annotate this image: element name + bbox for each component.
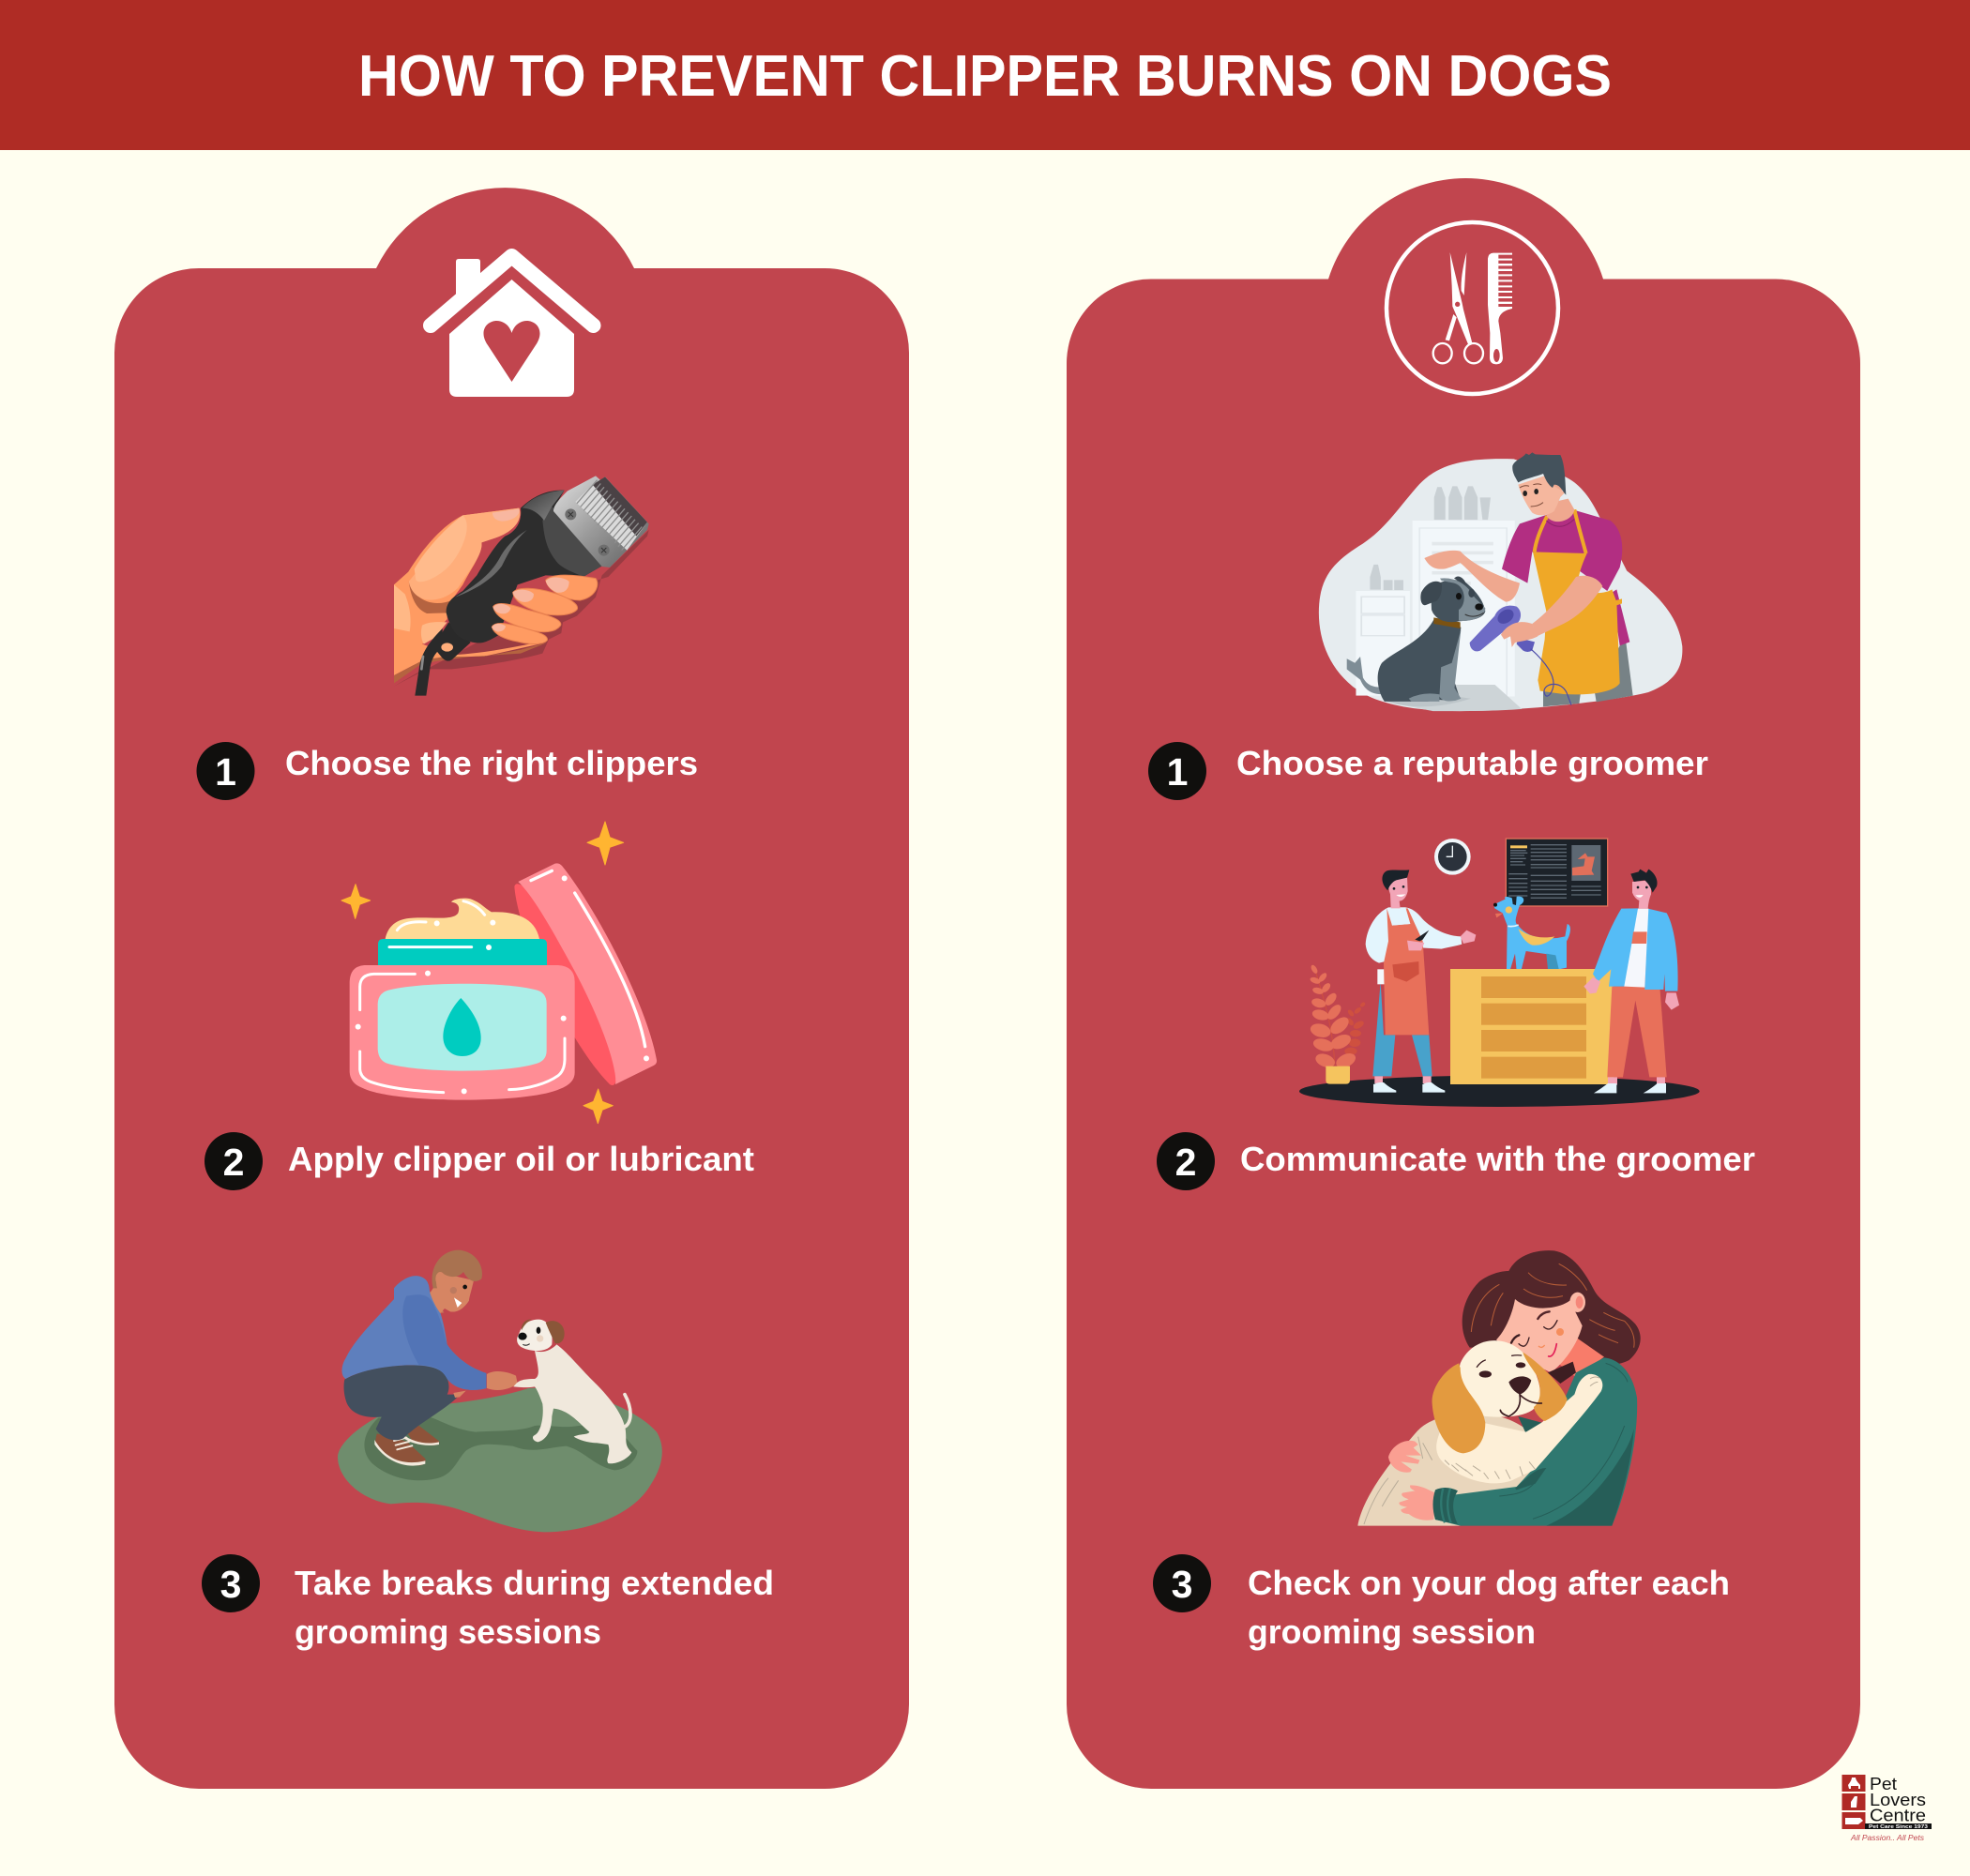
title: HOW TO PREVENT CLIPPER BURNS ON DOGS <box>358 44 1612 109</box>
logo: Pet Lovers Centre: Centre <box>1870 1807 1926 1825</box>
step 3: take breaks during extended grooming sessions: grooming sessions <box>295 1612 601 1651</box>
panel: at the groomer <box>1067 178 1860 1789</box>
logo: Pet Lovers Centre: Pet <box>1870 1775 1897 1793</box>
step 3: check on your dog after each grooming session: Check on your dog after each <box>1248 1564 1730 1602</box>
step 2: apply clipper oil or lubricant: 2 <box>223 1141 244 1184</box>
illustration: hand holding clippers <box>394 476 649 696</box>
header banner <box>0 0 1970 150</box>
logo: Pet Lovers Centre <box>1842 1775 1932 1842</box>
step 3: check on your dog after each grooming session: grooming session <box>1248 1612 1536 1651</box>
panel: at home <box>114 188 909 1789</box>
logo: Pet Lovers Centre: All Passion.. All Pets <box>1850 1834 1924 1842</box>
logo: Pet Lovers Centre: Pet Care Since 1973 <box>1869 1824 1928 1830</box>
step 2: communicate with the groomer: Communicate with the groomer <box>1240 1140 1755 1178</box>
step 1: choose a reputable groomer: Choose a reputable groomer <box>1236 744 1708 782</box>
step 3: check on your dog after each grooming session: 3 <box>1172 1563 1192 1606</box>
illustration: groomer drying dog <box>1319 452 1682 711</box>
step 1: choose a reputable groomer: 1 <box>1167 750 1188 794</box>
illustration: woman hugging dog <box>1357 1250 1641 1526</box>
illustration: talking to the groomer at counter <box>1299 839 1700 1107</box>
step 3: take breaks during extended grooming sessions <box>202 1554 774 1651</box>
step 2: apply clipper oil or lubricant <box>205 1132 754 1190</box>
step 1: choose the right clippers: Choose the right clippers <box>285 744 698 782</box>
step 3: take breaks during extended grooming sessions: 3 <box>220 1563 241 1606</box>
step 2: communicate with the groomer: 2 <box>1175 1141 1196 1184</box>
illustration: jar of lubricant <box>341 822 657 1124</box>
illustration: man shaking paw with dog <box>338 1250 662 1532</box>
step 2: apply clipper oil or lubricant: Apply clipper oil or lubricant <box>288 1140 754 1178</box>
icon: scissors and comb <box>1387 222 1558 394</box>
step 3: take breaks during extended grooming sessions: Take breaks during extended <box>295 1564 774 1602</box>
step 1: choose a reputable groomer <box>1148 742 1708 800</box>
step 3: check on your dog after each grooming session <box>1153 1554 1730 1651</box>
icon: house with heart <box>431 256 593 397</box>
step 1: choose the right clippers: 1 <box>215 750 236 794</box>
step 2: communicate with the groomer <box>1157 1132 1755 1190</box>
step 1: choose the right clippers <box>197 742 698 800</box>
logo: Pet Lovers Centre: Lovers <box>1870 1791 1926 1809</box>
